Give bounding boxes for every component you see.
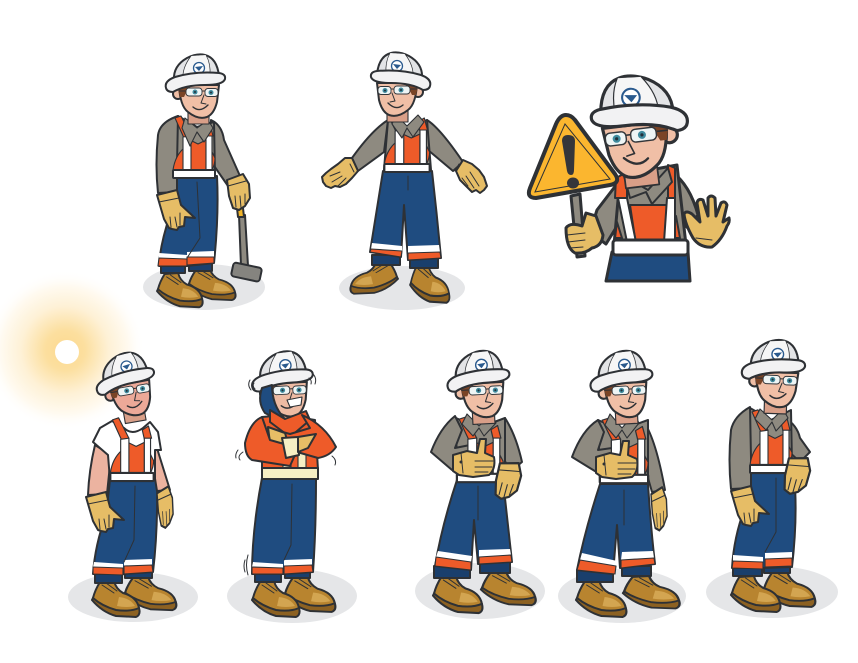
gloves: [157, 174, 250, 230]
sledgehammer: [231, 190, 262, 282]
figure: worker arms out: [322, 52, 487, 310]
ground shadow: [227, 569, 357, 623]
head with helmet: [371, 52, 430, 122]
boots: [731, 572, 815, 612]
shirt and arms: [352, 120, 463, 171]
trousers: [732, 473, 796, 576]
hi-vis vest: [384, 110, 430, 172]
trousers: [252, 478, 316, 582]
head with helmet: [587, 69, 695, 192]
exclamation mark: [562, 135, 575, 175]
gloves: [731, 452, 815, 526]
trousers: [370, 171, 441, 268]
boots: [252, 577, 335, 617]
sun: [55, 340, 79, 364]
ground shadow: [339, 266, 465, 310]
head with helmet: [446, 349, 512, 426]
collar: [392, 115, 424, 138]
head with helmet: [166, 54, 225, 124]
ground shadow: [415, 563, 545, 619]
shirt and arms: [730, 407, 810, 489]
collar: [462, 414, 496, 436]
figure: cold worker in winter gear: [227, 350, 357, 623]
trousers: [577, 484, 655, 582]
warning sign: [529, 115, 617, 198]
shirt and arms: [590, 165, 698, 245]
trousers: [434, 480, 512, 578]
trousers: [606, 252, 690, 281]
hi-vis vest: [110, 418, 154, 481]
boots: [92, 577, 176, 617]
figure: sunburnt worker: [68, 349, 198, 622]
boots: [157, 269, 236, 307]
crossed arms: [245, 415, 336, 466]
shirt and arms: [156, 116, 240, 193]
shirt and arms: [572, 420, 665, 492]
head with helmet: [250, 350, 315, 425]
figure: worker holding warning sign: [529, 69, 729, 281]
warning sign post: [571, 194, 585, 257]
hand gripping post: [566, 213, 603, 253]
resting glove: [489, 457, 526, 503]
boots: [433, 572, 536, 613]
collar: [605, 414, 639, 438]
figure: worker with hand on hip: [706, 339, 838, 618]
head with helmet: [91, 349, 162, 427]
hi-vis vest: [750, 410, 792, 473]
sun glare: [0, 270, 145, 430]
head with helmet: [589, 349, 655, 426]
boots: [576, 576, 680, 617]
balaclava side: [260, 385, 284, 420]
figure: worker with thumb up: [415, 349, 545, 619]
shirt and arms: [431, 416, 522, 478]
ground shadow: [558, 569, 686, 623]
collar: [624, 168, 672, 204]
sunburnt arms: [88, 445, 170, 495]
hi-vis vest: [457, 417, 503, 482]
thumbs-up glove: [453, 439, 494, 477]
ground shadow: [68, 572, 198, 622]
head with helmet: [740, 339, 806, 415]
boots: [350, 262, 449, 303]
trousers: [93, 480, 157, 583]
trousers: [158, 176, 218, 273]
collar: [182, 118, 213, 146]
hi-vis vest: [173, 116, 215, 178]
collar: [755, 409, 788, 431]
hanging glove: [651, 487, 667, 530]
gloves: [86, 486, 173, 532]
ground shadow: [706, 566, 838, 618]
ground shadow: [143, 264, 265, 310]
scarf collar: [270, 410, 310, 437]
raised glove: [684, 196, 729, 247]
white t-shirt: [93, 421, 161, 480]
hi-vis vest: [613, 165, 688, 255]
thumbs-up glove: [596, 441, 637, 479]
figure: worker with sledgehammer: [143, 54, 265, 310]
hi-vis vest: [600, 418, 648, 483]
gloves: [322, 158, 487, 193]
orange winter jacket: [262, 415, 318, 479]
gritted teeth: [287, 397, 302, 407]
shiver marks: [236, 374, 336, 575]
figure: second worker with thumb up: [558, 349, 686, 623]
